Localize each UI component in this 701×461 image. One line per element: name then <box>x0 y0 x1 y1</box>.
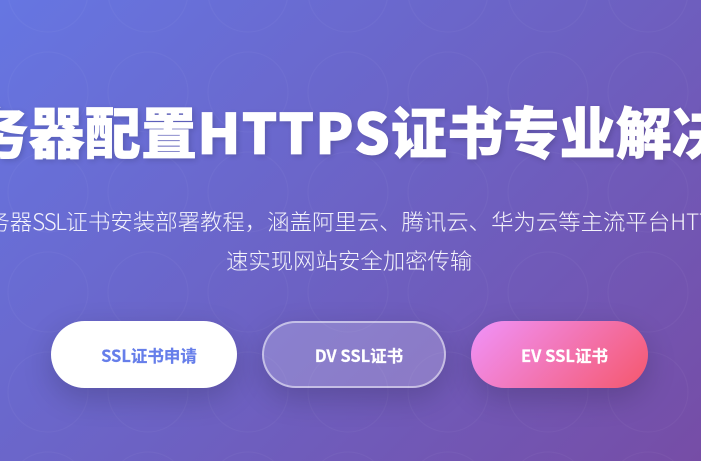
subtitle line 2: 速实现网站安全加密传输 <box>226 244 472 276</box>
button: EV SSL certificate: EV SSL证书 <box>521 343 608 367</box>
button: SSL certificate application <box>51 321 237 388</box>
button: DV SSL certificate <box>262 321 446 388</box>
button: SSL certificate application: SSL证书申请 <box>101 343 197 367</box>
button: DV SSL certificate: DV SSL证书 <box>315 343 403 367</box>
button: EV SSL certificate <box>471 321 648 388</box>
